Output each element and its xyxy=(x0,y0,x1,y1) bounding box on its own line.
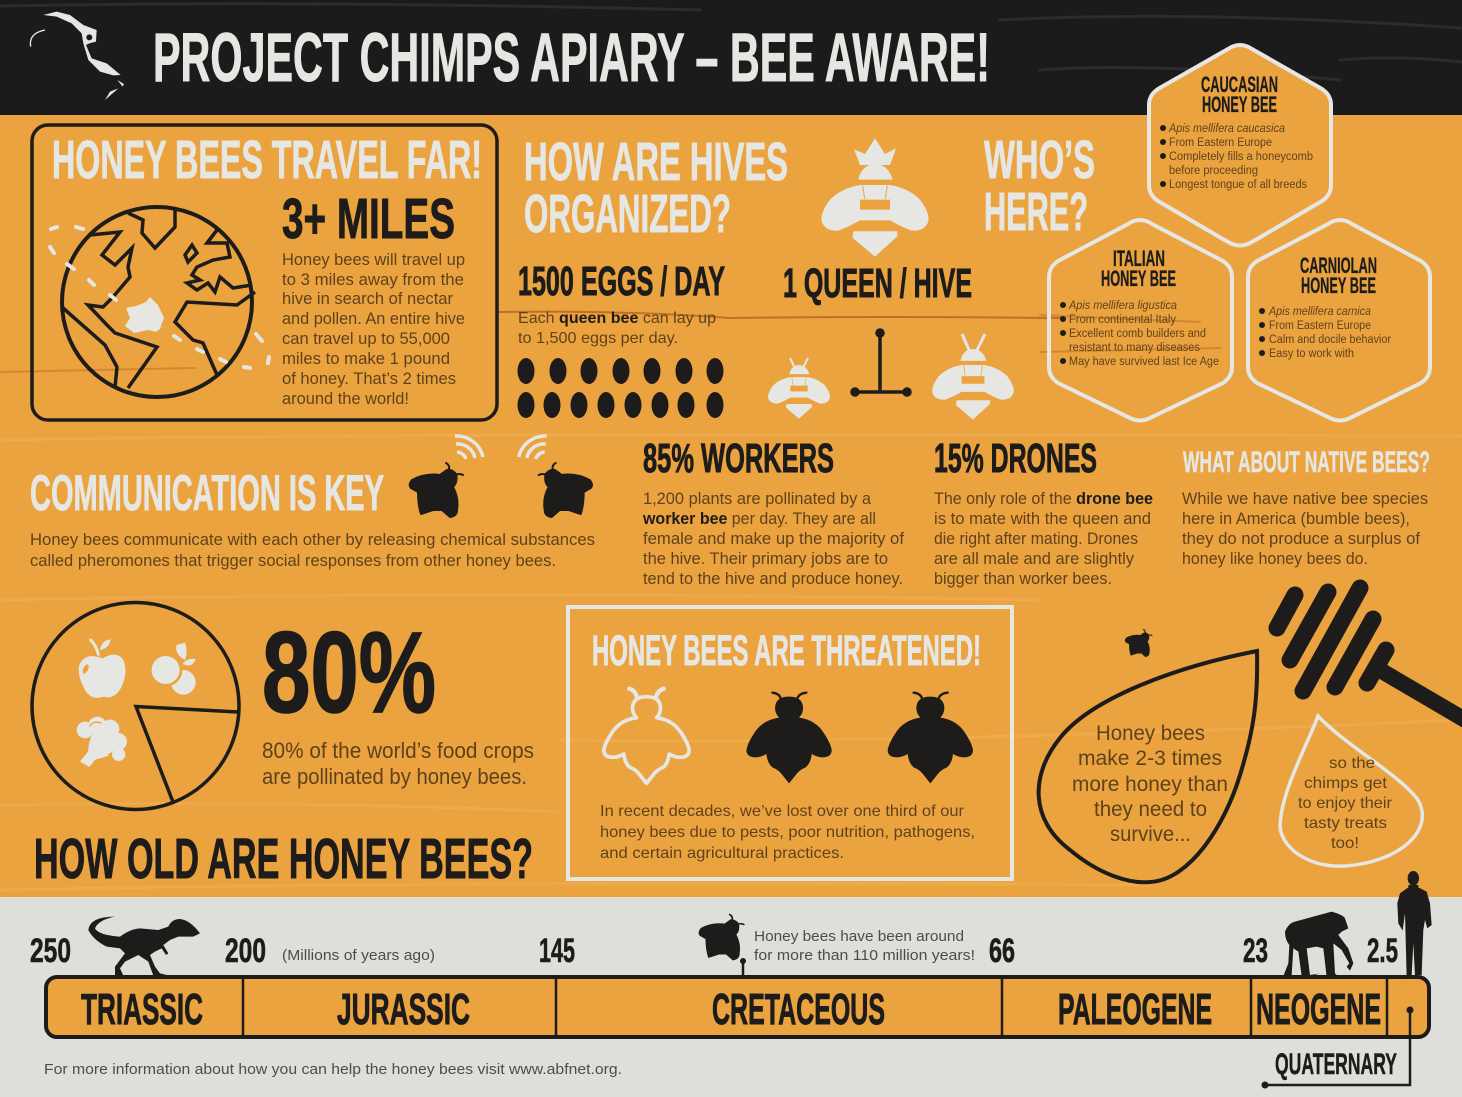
list: italian facts: Apis mellifera ligustica xyxy=(1068,300,1177,312)
text: drones description: The only role of the drone bee xyxy=(934,490,1153,508)
text: honey surplus: Honey bees xyxy=(1096,722,1205,745)
text: travel description: can travel up to 55,000 xyxy=(282,330,450,348)
text: native bees description: here in America (bumble bees), xyxy=(1182,510,1410,528)
text: drones description: are all male and are slightly xyxy=(934,550,1135,568)
column: drone bees xyxy=(934,435,1153,588)
text: travel description: and pollen. An entire hive xyxy=(282,310,465,328)
text: travel description: hive in search of nectar xyxy=(282,290,454,308)
stat: 85% workers: 85% WORKERS xyxy=(643,435,834,481)
text: native bees description xyxy=(1182,490,1428,568)
text: honey surplus: make 2-3 times xyxy=(1078,747,1222,770)
heading: threatened: HONEY BEES ARE THREATENED! xyxy=(592,627,981,675)
panel: caucasian honey bee xyxy=(1149,45,1331,246)
label: timeline ages: 250 xyxy=(30,932,71,970)
text: queen eggs: Each queen bee can lay up xyxy=(518,310,716,327)
heading: how are hives organized: HOW ARE HIVES xyxy=(524,132,788,192)
panel: honey bees are threatened xyxy=(568,607,1012,879)
text: bee age note xyxy=(754,928,975,964)
text: threat description: In recent decades, we’ve lost over one third of our xyxy=(600,803,965,820)
list: italian facts: From continental Italy xyxy=(1069,314,1176,326)
text: travel description: Honey bees will travel up xyxy=(282,251,465,269)
column: worker bees xyxy=(642,435,904,588)
icon: human silhouette xyxy=(1397,871,1432,979)
text: queen eggs xyxy=(518,310,716,347)
list: italian facts: Excellent comb builders and xyxy=(1069,328,1206,340)
text: workers description: 1,200 plants are pollinated by a xyxy=(643,490,872,508)
label: period names: TRIASSIC xyxy=(81,985,203,1034)
text: native bees description: honey like honey bees do. xyxy=(1182,550,1368,568)
stat: 1500 eggs per day: 1500 EGGS / DAY xyxy=(518,258,725,304)
list: italian facts: resistant to many diseases xyxy=(1069,342,1200,354)
heading: italian: ITALIAN xyxy=(1113,246,1165,271)
list: caucasian facts: Completely fills a honeycomb xyxy=(1169,151,1313,163)
label: quaternary with leader line xyxy=(1262,1006,1414,1088)
heading: italian: HONEY BEE xyxy=(1101,266,1176,291)
column: native bees xyxy=(1182,446,1430,568)
heading: carniolan: HONEY BEE xyxy=(1301,273,1376,298)
list: caucasian facts: Longest tongue of all breeds xyxy=(1169,179,1307,191)
text: bee age note: Honey bees have been around xyxy=(754,928,964,945)
stat: 80 percent: 80% xyxy=(262,609,436,737)
text: queen eggs: to 1,500 eggs per day. xyxy=(518,330,678,347)
icon: rows of eggs xyxy=(518,358,724,418)
text: bee age note: for more than 110 million years! xyxy=(754,947,975,964)
icon: timeline bee with pin xyxy=(699,914,746,977)
label: timeline ages: 145 xyxy=(539,932,575,970)
text: workers description: female and make up the majority of xyxy=(643,530,904,548)
icon: filled bee right xyxy=(888,693,973,783)
list: carniolan facts: Easy to work with xyxy=(1269,348,1354,360)
stat: 15% drones: 15% DRONES xyxy=(934,435,1097,481)
label: timeline ages: 23 xyxy=(1243,932,1268,970)
text: drones description: bigger than worker bees. xyxy=(934,570,1112,588)
stat: 3+ miles: 3+ MILES xyxy=(282,187,455,251)
panel: honey bees travel far xyxy=(32,125,497,420)
heading: who's here: HERE? xyxy=(984,182,1088,242)
list: carniolan facts: From Eastern Europe xyxy=(1269,320,1371,332)
text: travel description xyxy=(282,251,465,408)
icon: queen bee with crown xyxy=(821,138,929,257)
timeline band background xyxy=(0,897,1462,1097)
icon: honey dipper xyxy=(1277,588,1462,724)
text: drones description: die right after mating. Drones xyxy=(934,530,1138,548)
icon: filled bee left xyxy=(746,693,832,783)
heading: italian xyxy=(1101,246,1176,291)
text: chimps treats xyxy=(1298,755,1393,852)
text: honey surplus: survive... xyxy=(1110,823,1191,846)
list: caucasian facts: before proceeding xyxy=(1169,165,1258,177)
text: workers description: tend to the hive and produce honey. xyxy=(643,570,903,588)
header band xyxy=(0,0,1462,115)
list: italian facts: May have survived last Ice Age xyxy=(1069,356,1219,368)
heading: communication is key: COMMUNICATION IS KEY xyxy=(30,465,384,521)
panel: italian honey bee xyxy=(1049,220,1232,420)
label: timeline ages xyxy=(30,932,1398,970)
heading: who's here xyxy=(984,130,1095,242)
text: travel description: around the world! xyxy=(282,390,409,408)
heading: travel far: HONEY BEES TRAVEL FAR! xyxy=(52,130,482,190)
list: carniolan facts xyxy=(1259,306,1391,360)
list: caucasian facts xyxy=(1160,123,1313,191)
stat: 1 queen per hive: 1 QUEEN / HIVE xyxy=(783,260,972,306)
text: chimps treats: so the xyxy=(1329,755,1375,772)
heading: who's here: WHO’S xyxy=(984,130,1095,190)
list: italian facts xyxy=(1060,300,1219,368)
text: pollination statement: 80% of the world’s food crops xyxy=(262,738,534,763)
text: native bees description: While we have native bee species xyxy=(1182,490,1428,508)
heading: carniolan xyxy=(1300,253,1377,298)
text: travel description: miles to make 1 pound xyxy=(282,350,450,368)
text: footer note: For more information about how you can help the honey bees visit www.abfnet.org. xyxy=(44,1061,622,1078)
list: caucasian facts: From Eastern Europe xyxy=(1169,137,1272,149)
chart: pie 80 percent with food icons xyxy=(32,602,239,810)
icon: apple xyxy=(79,639,125,698)
text: threat description: honey bees due to pests, poor nutrition, pathogens, xyxy=(600,824,975,841)
text: chimps treats: chimps get xyxy=(1304,775,1388,792)
text: threat description: and certain agricultural practices. xyxy=(600,845,844,862)
text: chimps treats: too! xyxy=(1331,835,1359,852)
timeline bar xyxy=(46,977,1429,1037)
label: timeline ages: 2.5 xyxy=(1367,932,1398,970)
text: workers description: the hive. Their primary jobs are to xyxy=(643,550,888,568)
panel: carniolan honey bee xyxy=(1248,220,1430,420)
heading: how are hives organized: ORGANIZED? xyxy=(524,184,731,244)
heading: how are hives organized xyxy=(524,132,788,244)
icon: globe with flight path xyxy=(50,207,269,397)
logo: chimp silhouette xyxy=(30,12,124,100)
label: period names: PALEOGENE xyxy=(1058,985,1212,1034)
text: honey surplus: they need to xyxy=(1094,798,1207,821)
label: timeline ages: 66 xyxy=(989,932,1015,970)
list: carniolan facts: Calm and docile behavior xyxy=(1269,334,1391,346)
icon: chimp silhouette xyxy=(1283,912,1353,977)
text: workers description xyxy=(642,490,904,588)
icon: broccoli xyxy=(77,717,127,767)
icon: worker bee xyxy=(768,358,830,419)
heading: caucasian xyxy=(1201,72,1278,117)
text: communication description xyxy=(30,531,595,570)
heading: how old are honey bees: HOW OLD ARE HONEY BEES? xyxy=(34,827,533,891)
text: travel description: to 3 miles away from the xyxy=(282,271,464,289)
text: chimps treats: tasty treats xyxy=(1304,815,1387,832)
icon: communicating bee left xyxy=(410,436,483,517)
text: pollination statement xyxy=(262,738,534,789)
heading: caucasian: HONEY BEE xyxy=(1202,92,1277,117)
heading: carniolan: CARNIOLAN xyxy=(1300,253,1377,278)
text: honey surplus xyxy=(1072,722,1228,846)
icon: fruit xyxy=(150,643,196,695)
label: timeline ages: 200 xyxy=(225,932,266,970)
text: travel description: of honey. That’s 2 times xyxy=(282,370,456,388)
callout: large honey drop xyxy=(1039,651,1257,882)
text: communication description: Honey bees communicate with each other by releasing chemical substances xyxy=(30,531,595,549)
text: pollination statement: are pollinated by honey bees. xyxy=(262,764,527,789)
icon: drone bee xyxy=(932,334,1014,419)
text: threat description xyxy=(600,803,975,862)
text: communication description: called pheromones that trigger social responses from other honey bees. xyxy=(30,552,556,570)
icon: small flying bee xyxy=(1125,630,1152,656)
label: period names: CRETACEOUS xyxy=(712,985,885,1034)
list: caucasian facts: Apis mellifera caucasica xyxy=(1168,123,1285,135)
text: drones description xyxy=(934,490,1153,588)
callout: small honey drop xyxy=(1280,716,1422,866)
icon: dinosaur silhouette xyxy=(88,917,200,976)
text: honey surplus: more honey than xyxy=(1072,773,1228,796)
icon: communicating bee right xyxy=(519,436,592,517)
text: chimps treats: to enjoy their xyxy=(1298,795,1393,812)
heading: caucasian: CAUCASIAN xyxy=(1201,72,1278,97)
list: carniolan facts: Apis mellifera carnica xyxy=(1268,306,1371,318)
text: workers description: worker bee per day. They are all xyxy=(642,510,876,528)
text: native bees description: they do not produce a surplus of xyxy=(1182,530,1420,548)
icon: outline bee xyxy=(604,689,689,783)
label: period names xyxy=(81,985,1381,1034)
label: period names: JURASSIC xyxy=(337,985,470,1034)
text: millions of years ago: (Millions of years ago) xyxy=(282,947,435,964)
icon: scale connector xyxy=(852,330,910,395)
text: drones description: is to mate with the queen and xyxy=(934,510,1151,528)
